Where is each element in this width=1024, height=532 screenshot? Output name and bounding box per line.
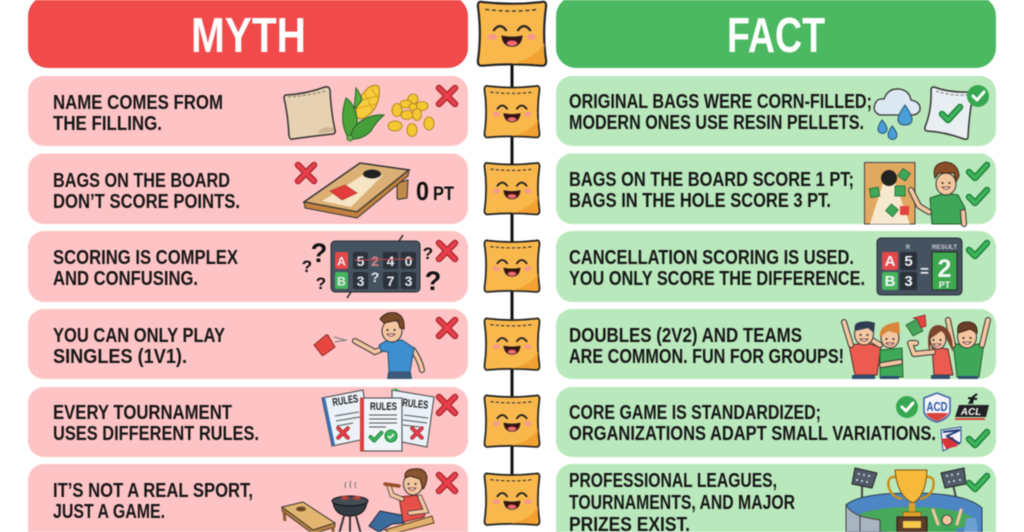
text: myth 4: YOU CAN ONLY PLAY	[53, 324, 225, 347]
icon: check badge	[896, 396, 918, 418]
text: myth 6	[53, 479, 253, 523]
icon: red x	[439, 475, 455, 491]
heading: myth: MYTH	[191, 9, 306, 63]
icon: red x	[298, 165, 314, 181]
heading: fact: FACT	[727, 9, 825, 63]
icon: ACL logo: ACL	[960, 407, 981, 418]
icon: stadium and trophy	[846, 468, 982, 532]
icon: rule books: RULES	[402, 397, 429, 412]
icon: red x	[439, 397, 455, 413]
panel: myth row 5	[28, 387, 468, 457]
icon: confusing scoreboard: 2	[371, 253, 379, 269]
panel: myth row 3	[28, 231, 468, 302]
text: myth 4: SINGLES (1V1).	[53, 345, 187, 368]
icon: result scoreboard: PT	[939, 280, 951, 290]
icon: S logo	[941, 427, 961, 451]
text: myth 2: DON’T SCORE POINTS.	[53, 190, 240, 213]
icon: sack, corn and kernels	[284, 85, 434, 141]
icon: red x	[439, 88, 455, 104]
text: myth 5: EVERY TOURNAMENT	[53, 401, 232, 424]
mascot: row 1 bag	[484, 86, 540, 137]
text: myth 3	[53, 246, 238, 290]
text: myth 3: AND CONFUSING.	[53, 267, 198, 290]
text: myth 2	[53, 169, 240, 213]
icon: ACD logo: ACD	[926, 399, 948, 414]
icon: green check	[969, 243, 987, 256]
panel: fact row 4	[556, 309, 996, 379]
icon: board with bags	[864, 162, 915, 224]
icon: green check badge	[967, 85, 989, 107]
icon: white resin bag	[925, 87, 973, 139]
text: fact 4: DOUBLES (2V2) AND TEAMS	[569, 324, 802, 347]
center connector line	[510, 60, 514, 505]
icon: result scoreboard: 3	[904, 273, 913, 290]
mascot: row 3 bag	[484, 240, 540, 292]
icon: green check	[969, 432, 987, 445]
panel: fact row 1	[556, 76, 996, 146]
panel: myth row 1	[28, 76, 468, 146]
text: myth 6: JUST A GAME.	[53, 500, 165, 523]
label: 0 pt	[416, 176, 454, 206]
text: fact 5	[569, 401, 936, 445]
icon: confusing scoreboard: 3	[405, 273, 413, 289]
panel: fact row 3	[556, 231, 996, 302]
icon: rule books: RULES	[332, 393, 359, 409]
text: fact 1	[569, 90, 872, 134]
icon: confusing scoreboard: B	[337, 274, 346, 288]
panel: myth header	[28, 0, 468, 68]
icon: result scoreboard	[877, 238, 962, 295]
mascot: header bag	[478, 2, 546, 66]
icon: result scoreboard: 2	[938, 255, 951, 283]
icon: confusing scoreboard: 3	[357, 273, 365, 289]
text: fact 4	[569, 324, 844, 368]
icon: confusing scoreboard: 5	[357, 253, 365, 269]
icon: confusing scoreboard: ?	[425, 266, 441, 296]
text: fact 6: TOURNAMENTS, AND MAJOR	[569, 491, 795, 514]
panel: myth row 4	[28, 309, 468, 379]
panel: fact row 6	[556, 464, 996, 532]
panel: myth row 2	[28, 154, 468, 224]
panel: fact row 2	[556, 154, 996, 224]
text: fact 4: ARE COMMON. FUN FOR GROUPS!	[569, 345, 844, 368]
icon: confusing scoreboard: ?	[302, 257, 312, 276]
text: fact 1: ORIGINAL BAGS WERE CORN-FILLED;	[569, 90, 872, 113]
text: fact 3	[569, 246, 865, 290]
icon: two green checks	[969, 165, 987, 203]
panel: fact row 5	[556, 387, 996, 457]
text: myth 4	[53, 324, 225, 368]
text: fact 6: PROFESSIONAL LEAGUES,	[569, 469, 777, 492]
icon: ACD logo	[924, 393, 950, 422]
icon: confusing scoreboard: ?	[371, 269, 379, 285]
icon: confusing scoreboard: A	[337, 254, 346, 268]
icon: green check	[969, 476, 987, 489]
icon: result scoreboard: =	[920, 263, 929, 280]
text: fact 2: BAGS ON THE BOARD SCORE 1 PT;	[569, 168, 854, 191]
text: fact 5: CORE GAME IS STANDARDIZED;	[569, 401, 821, 424]
text: myth 2: BAGS ON THE BOARD	[53, 169, 230, 192]
icon: red x	[439, 320, 455, 336]
text: myth 1: NAME COMES FROM	[53, 91, 223, 114]
icon: person throwing bag	[314, 313, 422, 379]
icon: confusing scoreboard: ?	[311, 238, 327, 268]
mascot: row 2 bag	[484, 163, 540, 214]
icon: result scoreboard: RESULT	[932, 244, 957, 251]
text: myth 1	[53, 91, 223, 135]
text: fact 3: YOU ONLY SCORE THE DIFFERENCE.	[569, 267, 865, 290]
mascot: row 4 bag	[484, 318, 540, 370]
icon: rule books: RULES	[370, 401, 397, 413]
icon: red x	[439, 243, 455, 259]
text: myth 1: THE FILLING.	[53, 112, 162, 135]
mascot: row 6 bag	[484, 473, 540, 525]
icon: confusing scoreboard: ?	[316, 274, 326, 293]
text: fact 2	[569, 168, 854, 212]
icon: board, grill and relaxing man	[282, 469, 434, 532]
icon: confusing scoreboard: 0	[405, 253, 413, 269]
text: fact 2: BAGS IN THE HOLE SCORE 3 PT.	[569, 189, 831, 212]
mascot: row 5 bag	[484, 395, 540, 447]
icon: cornhole board	[304, 163, 409, 218]
icon: ACL logo	[955, 394, 989, 419]
text: myth 6: IT’S NOT A REAL SPORT,	[53, 479, 253, 502]
icon: result scoreboard: B	[885, 273, 896, 290]
icon: result scoreboard: R	[906, 245, 911, 251]
text: fact 5: ORGANIZATIONS ADAPT SMALL VARIATIONS.	[569, 422, 936, 445]
icon: confusing scoreboard	[302, 235, 441, 298]
icon: result scoreboard: A	[885, 253, 896, 270]
text: myth 5	[53, 401, 259, 445]
label: 0 pt: PT	[433, 183, 454, 205]
icon: confusing scoreboard: 4	[387, 253, 395, 269]
text: myth 5: USES DIFFERENT RULES.	[53, 422, 259, 445]
text: fact 6	[569, 469, 795, 532]
icon: rain cloud	[874, 89, 920, 140]
icon: result scoreboard: 5	[904, 253, 913, 270]
panel: myth row 6	[28, 464, 468, 532]
text: fact 1: MODERN ONES USE RESIN PELLETS.	[569, 111, 864, 134]
icon: pointing man	[911, 162, 965, 224]
icon: confusing scoreboard: 7	[387, 273, 395, 289]
text: myth 3: SCORING IS COMPLEX	[53, 246, 238, 269]
icon: confusing scoreboard: ?	[423, 244, 433, 263]
label: 0 pt: 0	[416, 176, 429, 206]
panel: fact header	[556, 0, 996, 68]
text: fact 3: CANCELLATION SCORING IS USED.	[569, 246, 854, 269]
icon: cheering group	[844, 315, 988, 379]
icon: rule books	[322, 388, 434, 451]
